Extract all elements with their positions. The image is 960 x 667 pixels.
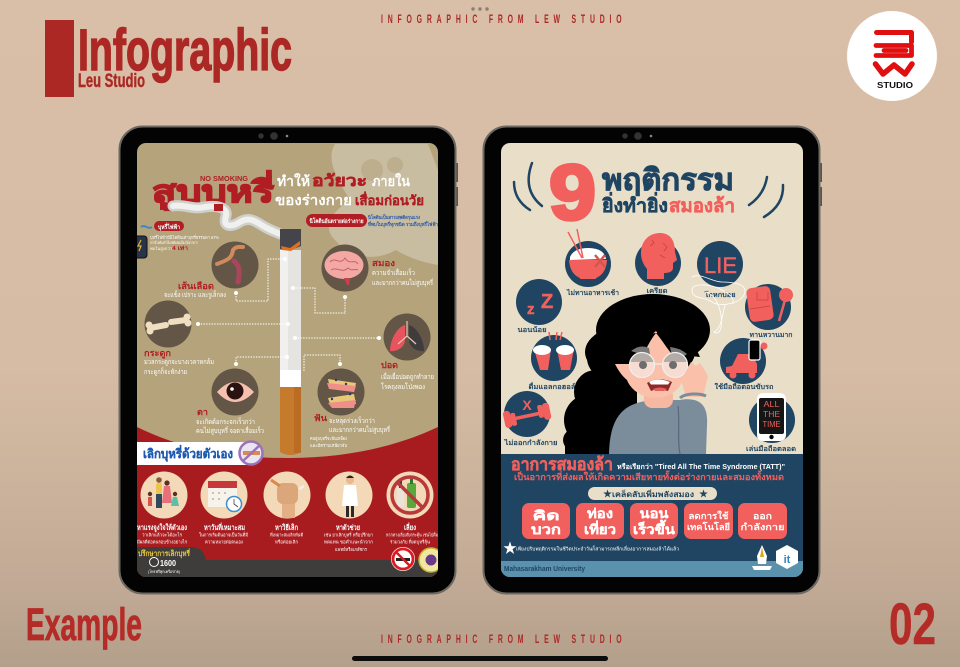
tip: travel: เที่ยว <box>584 520 616 537</box>
icon: phone all the time <box>749 393 795 443</box>
icon: lie: LIE <box>704 253 737 278</box>
note with star <box>503 540 679 556</box>
footer strip: Mahasarakham University <box>504 564 586 573</box>
icon: dumbbell <box>502 391 552 437</box>
callout: hotline 1600: ปรึกษาการเลิกบุหรี่ <box>138 547 191 558</box>
header: title block: Leu Studio <box>78 71 145 92</box>
heading: brain fatigue: หรือเรียกว่า "Tired All The Time Syndrome (TATT)" <box>617 463 785 471</box>
icon: no smoking sign <box>391 547 415 571</box>
text: find a method: ที่เหมาะสมเลิกทันที <box>270 532 303 538</box>
icon: family <box>140 472 188 518</box>
header: title block <box>45 18 292 97</box>
icon: rice bowl, no breakfast <box>565 229 611 287</box>
label: eye <box>196 407 264 435</box>
label: phone while driving: ใช้มือถือตอนขับรถ <box>714 382 774 391</box>
pill: tips heading: ★ <box>603 489 612 499</box>
text: find a date: หาวันที่เหมาะสม <box>204 521 245 532</box>
pill: tips heading: เคล็ดลับเพิ่มพลังสมอง <box>612 488 694 499</box>
label: bone: กระดูกก็จะหักง่าย <box>144 367 187 376</box>
label: bone: กระดูก <box>144 348 171 359</box>
logo: Lew Studio <box>847 11 937 101</box>
label: brain: และมากกว่าคนไม่สูบบุหรี่ <box>372 278 433 287</box>
text: find a method: หาวิธีเลิก <box>275 523 298 532</box>
panel: syndrome explanation <box>501 454 803 577</box>
heading: brain fatigue: เป็นอาการที่ส่งผลให้เกิดความเสียหายทั้งต่อร่างกายและสมองทั้งหมด <box>514 470 784 482</box>
icon: calendar clock <box>200 472 248 518</box>
eyebrows <box>631 347 650 354</box>
glasses <box>630 352 688 378</box>
panel: right tablet, brain fatigue infographic <box>484 126 822 594</box>
text: find a helper: ทดแทน ขอคำแนะนำจาก <box>324 540 373 546</box>
page number: 02 <box>889 592 936 657</box>
icon: lungs <box>384 314 430 360</box>
icon: teeth <box>318 368 364 416</box>
text: avoid: เลี่ยง <box>404 521 416 532</box>
panel: left tablet, smoking infographic <box>120 126 458 594</box>
callout: e-cigarette text: บุหรี่ไฟฟ้า <box>158 222 180 231</box>
label: eye: จะเกิดต้อกระจกเร็วกว่า <box>196 417 255 426</box>
connector lines <box>196 257 381 372</box>
heading: brain fatigue <box>511 455 785 482</box>
icon: broken bone <box>144 300 192 348</box>
label: little sleep: นอนน้อย <box>518 325 547 334</box>
skull watermark <box>329 144 438 265</box>
heading: 9 behaviours <box>549 148 735 236</box>
heading: no smoking <box>152 170 424 211</box>
label: skip breakfast: ไม่ทานอาหารเช้า <box>566 288 619 297</box>
heading: brain fatigue: อาการสมองล้า <box>511 455 613 474</box>
heading accent: red stroke below title <box>160 202 223 211</box>
text: find a date: ในการเริ่มต้นอาจเป็นวันที่มี <box>199 530 248 538</box>
header: top caption <box>381 7 622 27</box>
tip: sleep early: นอน <box>640 506 669 521</box>
label: no exercise: ไม่ออกกำลังกาย <box>503 438 558 447</box>
tip: travel <box>576 503 624 539</box>
label: alcohol: ดื่มแอลกอฮอล์ <box>528 381 576 391</box>
label: blood vessel: จะแข็ง เปราะ และรูเล็กลง <box>164 290 226 299</box>
pill: tips heading <box>588 487 717 500</box>
label: brain: สมอง <box>372 258 395 268</box>
header: title block: Infographic <box>78 18 292 83</box>
tip: exercise: ออก <box>753 511 772 521</box>
heading: no smoking: NO SMOKING <box>200 176 249 183</box>
label: blood vessel <box>164 280 226 299</box>
label: sweets: ทานหวานมาก <box>750 332 792 339</box>
callout: danger pill <box>306 213 438 228</box>
text: find a date <box>199 522 248 544</box>
icon: no alcohol <box>386 472 434 518</box>
label: bone: มวลกระดูกจะบางเวลาหกล้ม <box>144 358 214 366</box>
tip: sleep early <box>630 503 678 539</box>
label: lungs <box>381 360 434 391</box>
callout: e-cigarette text: พบในสูงกว่า <box>150 246 172 252</box>
icon: blood vessel <box>212 242 258 288</box>
icon: phone while driving <box>720 338 768 384</box>
icon: no cigarette badge <box>240 442 262 464</box>
callout: e-cigarette text: 4 เท่า <box>172 245 188 252</box>
label: example: Example <box>26 599 142 650</box>
decorative arcs <box>514 163 783 217</box>
heading: 9 behaviours: 9 <box>549 148 596 236</box>
label: brain <box>372 258 433 287</box>
icon: eye <box>212 368 258 416</box>
icon: phone all the time: THE <box>763 410 780 419</box>
label: teeth <box>310 413 390 448</box>
bottom dark strip <box>137 547 438 577</box>
home indicator <box>352 656 608 661</box>
footer strip <box>501 561 803 577</box>
neck <box>644 388 673 408</box>
callout: e-cigarette text: สารนิโคตินทำให้เสพติดต่อเนื่องได้มากกว่า <box>150 240 198 245</box>
tip: exercise <box>738 503 787 539</box>
text: motivation: ว่าเลิกแล้วจะได้อะไร <box>142 532 182 538</box>
icon: sleep zZ <box>516 279 562 325</box>
note with star: ★ <box>503 540 517 556</box>
sweater <box>609 399 707 454</box>
icon: stressed head <box>635 233 681 286</box>
label: lungs: เมื่อเยื่อปอดถูกทำลาย <box>381 372 434 381</box>
hand <box>681 362 708 397</box>
icon: beer mugs <box>531 332 577 381</box>
callout: e-cigarette text <box>150 221 219 252</box>
hair fringe <box>632 333 700 360</box>
callout: e-cigarette text: บุหรี่ไฟฟ้ามีนิโคตินเท่าบุหรี่ธรรมดา 67% <box>150 234 219 241</box>
heading: no smoking: ของร่างกาย <box>275 192 352 208</box>
icon: e-cigarette <box>137 225 152 258</box>
tip: less technology <box>684 503 733 539</box>
face <box>615 331 685 398</box>
heading: 9 behaviours: ยิ่งทำยิ่ง <box>602 192 668 217</box>
icon: fist <box>264 472 310 518</box>
label: lying: โกหกบ่อย <box>703 290 736 299</box>
red lower background <box>137 427 438 577</box>
tip: think positive: บวก <box>531 522 561 537</box>
label: brain: ความจำเสื่อมเร็ว <box>372 268 415 277</box>
tip: less technology: เทคโนโลยี <box>687 521 730 532</box>
callout: danger pill: นิโคตินเป็นสารเสพติดรุนแรง <box>368 213 420 221</box>
heading: no smoking: เสื่อมก่อนวัย <box>355 191 424 208</box>
heading: 9 behaviours: พฤติกรรม <box>602 164 734 197</box>
icon: smoke <box>173 206 280 234</box>
icon: university emblem <box>752 545 772 570</box>
label: lungs: ปอด <box>381 360 398 370</box>
text: find a method: หรือค่อยเลิก <box>275 538 298 546</box>
icon: IT hexagon: it <box>784 554 791 566</box>
tip: less technology: ลดการใช้ <box>688 510 728 521</box>
label: teeth: และมีคราบเหนียวจับ <box>310 443 347 448</box>
label: stress: เครียด <box>646 287 668 295</box>
icon: dumbbell: X <box>522 397 532 413</box>
text: avoid: ร่วมวงกับ ที่งดบุหรี่ลุ้น <box>390 538 431 546</box>
tip: think positive: คิด <box>532 508 560 523</box>
text: find a helper: แพทย์หรือเภสัชกร <box>335 546 367 553</box>
text: avoid <box>386 521 438 546</box>
mouth <box>647 379 672 391</box>
callout: hotline 1600 <box>138 547 191 575</box>
label: eye: ตา <box>197 407 208 417</box>
icon: IT hexagon <box>776 545 798 569</box>
label: bone <box>144 348 214 376</box>
tablet frame right <box>484 126 822 594</box>
text: motivation: มีผลดีต่อคนรอบข้างอย่างไร <box>137 538 187 546</box>
header: top caption: INFOGRAPHIC FROM LEW STUDIO <box>381 13 622 27</box>
tip: sleep early: เร็วขึ้น <box>633 519 675 537</box>
icon: lie <box>697 241 743 287</box>
text: find a helper: หาตัวช่วย <box>336 523 360 532</box>
label: teeth: จะหลุดร่วงเร็วกว่า <box>329 416 375 425</box>
text: motivation: หาแรงจูงใจให้ตัวเอง <box>137 523 187 533</box>
heading: no smoking: ภายใน <box>372 172 410 189</box>
icon: sleep zZ: Z <box>541 291 553 313</box>
tip: travel: ท่อง <box>587 506 613 521</box>
icon: tangled thought <box>692 276 745 333</box>
label: eye: คนไม่สูบบุหรี่ จอตาเสื่อมเร็ว <box>196 426 264 435</box>
icon: candy and chocolate <box>745 284 793 330</box>
logo: Lew Studio: STUDIO <box>877 80 913 90</box>
icon: sleep zZ: z <box>527 301 534 318</box>
icon: doctor <box>326 472 372 518</box>
text: avoid: หากทางเลี่ยงสิ่งกระตุ้น เช่นไปดื่ม <box>386 532 438 538</box>
icon: university seal <box>419 548 443 572</box>
heading: 9 behaviours: สมองล้า <box>669 195 735 217</box>
tip: think positive <box>522 503 570 539</box>
text: find a date: ความหมายต่อตนเอง <box>205 540 243 546</box>
callout: hotline 1600: (โทรฟรีทุกเครือข่าย) <box>148 569 181 575</box>
pill: tips heading: ★ <box>699 489 708 499</box>
label: blood vessel: เส้นเลือด <box>178 280 214 291</box>
banner: quit by yourself: เลิกบุหรี่ด้วยตัวเอง <box>143 445 233 462</box>
icon: cigarette <box>280 229 301 455</box>
callout: hotline 1600: 1600 <box>160 559 176 568</box>
label: phone always: เล่นมือถือตลอด <box>746 445 797 453</box>
tip: exercise: กำลังกาย <box>740 522 784 532</box>
heading: no smoking: สูบบุหรี่ <box>152 170 274 211</box>
icon: phone all the time: ALL <box>764 400 780 409</box>
label: lungs: โรคถุงลมโป่งพอง <box>381 382 425 391</box>
footer caption: INFOGRAPHIC FROM LEW STUDIO <box>381 633 622 647</box>
label: teeth: ฟัน <box>314 413 328 423</box>
heading: no smoking: ทำให้ <box>277 172 310 189</box>
text: find a helper: เช่น ยาเลิกบุหรี่ หรือปรึกษา <box>324 532 373 538</box>
label: teeth: คนสูบบุหรี่จะฟันเหลือง <box>310 435 347 442</box>
callout: danger pill: ที่พบในบุหรี่ทุกชนิด รวมถึงบุหรี่ไฟฟ้า <box>368 220 438 228</box>
text: find a method <box>270 523 303 546</box>
text: motivation <box>137 523 187 546</box>
woman with hair <box>563 294 710 455</box>
text: find a helper <box>324 523 373 553</box>
banner: quit by yourself <box>137 442 262 465</box>
callout: danger pill: นิโคตินอันตรายต่อร่างกาย <box>309 217 364 225</box>
icon: phone all the time: TIME <box>762 420 780 429</box>
heading: no smoking: อวัยวะ <box>312 172 367 190</box>
tablet frame left <box>120 126 458 594</box>
note with star: เพียงปรับพฤติกรรมในชีวิตประจำวันก็สามารถหลีกเลี่ยงอาการสมองล้าได้แล้ว <box>516 544 679 552</box>
label: teeth: และมากกว่าคนไม่สูบบุหรี่ <box>329 425 390 434</box>
icon: brain <box>322 244 368 292</box>
